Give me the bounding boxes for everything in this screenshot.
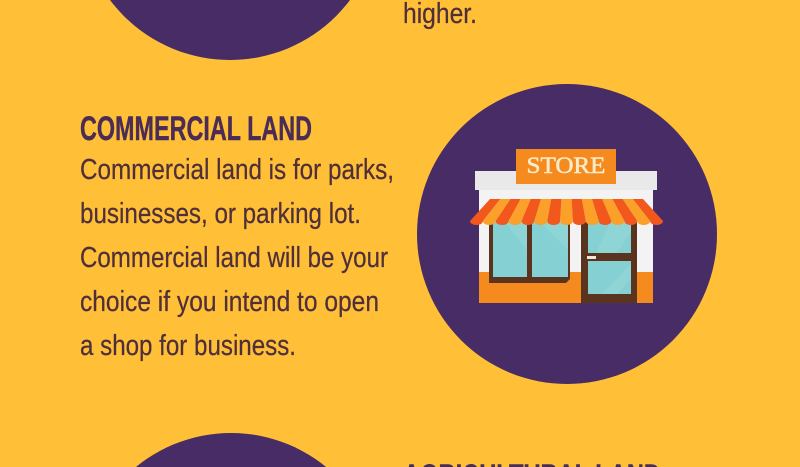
store door [581,222,637,303]
bottom circle [81,433,381,467]
text block: commercial land description: choice if you intend to open [80,286,379,318]
text block: commercial land description: businesses, or parking lot. [80,198,361,230]
heading: commercial land: COMMERCIAL LAND [80,110,312,148]
text block: commercial land description: Commercial land is for parks, [80,154,394,186]
text block: commercial land description: a shop for business. [80,330,296,362]
text block: commercial land description [80,154,394,362]
store awning [470,199,663,225]
store sign: STORE [526,153,606,178]
top circle [80,0,380,60]
text block: commercial land description: Commercial land will be your [80,242,388,274]
icon: store [470,149,663,303]
store window [489,222,570,283]
store wall [479,190,653,272]
store sign [516,149,616,184]
store roof band [475,171,657,190]
store lower wall [479,272,653,303]
main circle [417,84,717,384]
